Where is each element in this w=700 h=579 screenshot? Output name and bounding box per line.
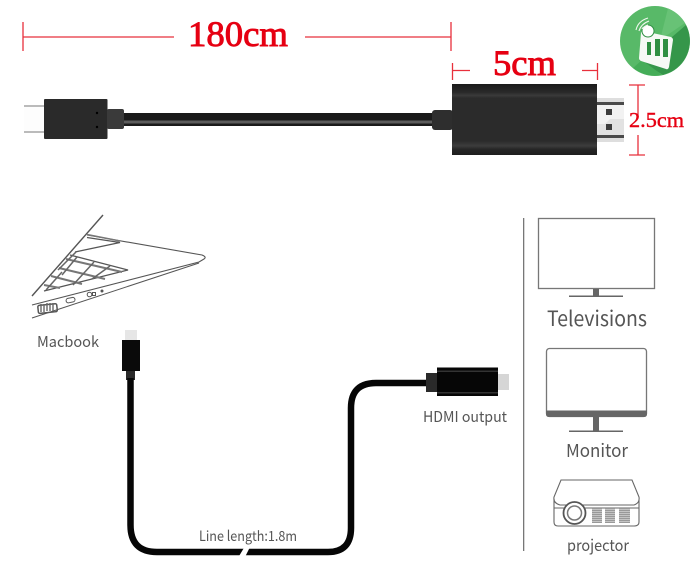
dimension: 2.5cm connector height: 2.5cm (629, 108, 684, 132)
label: Line length: Line length:1.8m (199, 526, 297, 546)
label: Macbook: Macbook (37, 331, 100, 352)
icon: television (538, 218, 654, 297)
vertical divider (523, 218, 524, 551)
USB-C connector photo (24, 99, 124, 139)
dimension: 5cm connector length: 5cm (493, 43, 556, 83)
USB-C connector drawing (122, 330, 140, 380)
label: HDMI output: HDMI output (423, 406, 507, 427)
label: projector: projector (567, 532, 630, 556)
HDMI connector photo (432, 84, 624, 155)
cable photo (124, 113, 432, 126)
dimension: 2.5cm connector height (629, 85, 684, 155)
HDMI connector drawing (426, 368, 509, 396)
dimension: 180cm cable length (23, 14, 451, 54)
icon: monitor (546, 348, 647, 432)
label: Televisions: Televisions (547, 303, 647, 333)
icon: green logo badge (620, 6, 690, 76)
label: Monitor: Monitor (566, 437, 629, 463)
icon: projector (554, 480, 639, 526)
dimension: 180cm cable length: 180cm (188, 14, 288, 54)
icon: Macbook laptop line drawing (32, 215, 205, 318)
cable drawing with break (130, 378, 428, 557)
dimension: 5cm connector length (452, 43, 598, 83)
